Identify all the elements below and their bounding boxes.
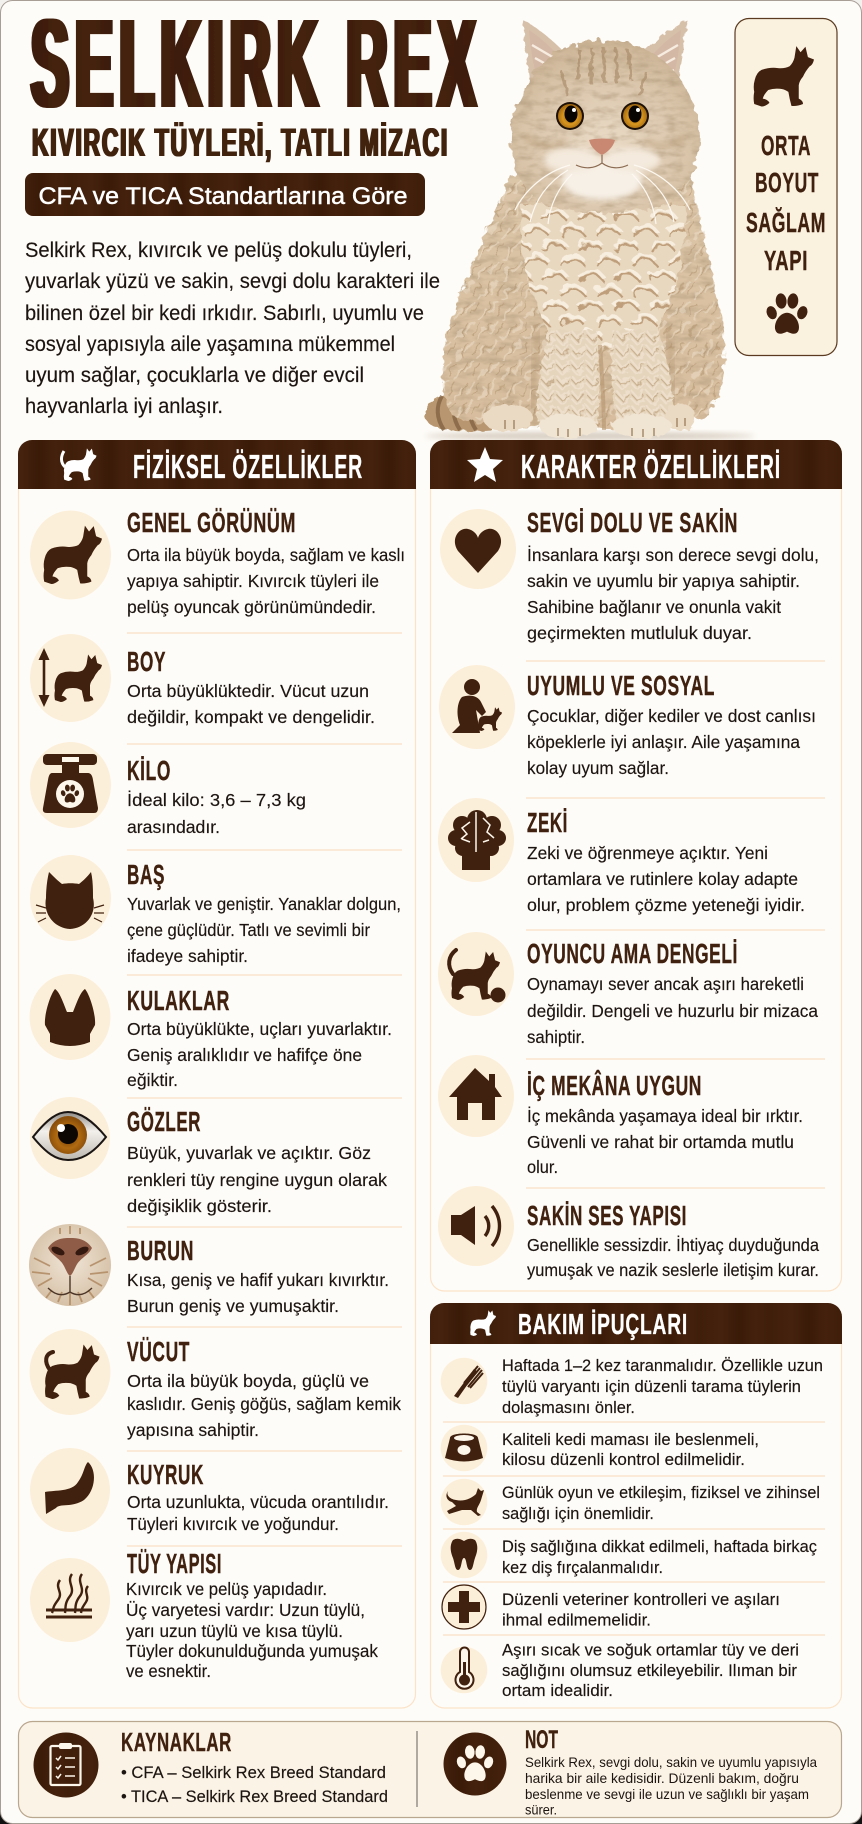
tip: grooming — [441, 1357, 823, 1417]
item: uyumlu ve sosyal: kolay uyum sağlar. — [527, 758, 669, 778]
note text: beslenme ve sevgi ile uzun ve sağlıklı bir yaşam — [525, 1786, 809, 1802]
tip: grooming: Haftada 1–2 kez taranmalıdır. Özellikle uzun — [502, 1357, 823, 1375]
item: kuyruk: KUYRUK — [127, 1459, 204, 1490]
item: zeki — [438, 798, 805, 915]
item: oyuncu ama dengeli: değildir. Dengeli ve huzurlu bir mizaca — [527, 1001, 818, 1021]
item: iç mekâna uygun: İÇ MEKÂNA UYGUN — [527, 1070, 702, 1101]
item: sevgi dolu ve sakin: sakin ve uyumlu bir yapıya sahiptir. — [527, 571, 800, 591]
item: gözler: renkleri tüy rengine uygun olarak — [127, 1170, 387, 1190]
item: iç mekâna uygun: İç mekânda yaşamaya ideal bir ırktır. — [527, 1106, 803, 1126]
item: sevgi dolu ve sakin: SEVGİ DOLU VE SAKİN — [527, 507, 738, 538]
heading: note: NOT — [525, 1726, 558, 1754]
size label: ORTA — [761, 130, 811, 161]
tip: food bowl: Kaliteli kedi maması ile beslenmeli, — [502, 1431, 759, 1449]
item: sakin ses yapısı: Genellikle sessizdir. İhtiyaç duyduğunda — [527, 1235, 819, 1255]
tip: food bowl: kilosu düzenli kontrol edilmelidir. — [502, 1451, 745, 1469]
panel header: care tips: BAKIM İPUÇLARI — [518, 1309, 688, 1341]
item: uyumlu ve sosyal — [439, 665, 816, 778]
item: iç mekâna uygun — [438, 1055, 803, 1177]
item: zeki: ortamlara ve rutinlere kolay adapte — [527, 869, 798, 889]
size badge — [735, 18, 837, 356]
item: sevgi dolu ve sakin: geçirmekten mutluluk duyar. — [527, 623, 752, 643]
item: gözler — [30, 1097, 387, 1216]
item: iç mekâna uygun: Güvenli ve rahat bir ortamda mutlu — [527, 1132, 794, 1152]
footer panel — [18, 1722, 842, 1818]
tip: temperature: Aşırı sıcak ve soğuk ortamlar tüy ve deri — [502, 1642, 799, 1660]
item: tüy yapısı — [30, 1548, 378, 1681]
note text: sürer. — [525, 1802, 557, 1818]
panel: character traits — [430, 440, 842, 1291]
size label — [746, 130, 826, 276]
item: genel görünüm: Orta ila büyük boyda, sağlam ve kaslı — [127, 545, 405, 565]
sources list — [121, 1764, 388, 1806]
item: zeki: Zeki ve öğrenmeye açıktır. Yeni — [527, 843, 768, 863]
item: zeki: ZEKİ — [527, 807, 568, 838]
intro text: yuvarlak yüzü ve sakin, sevgi dolu karakteri ile — [25, 270, 440, 293]
item: kilo: İdeal kilo: 3,6 – 7,3 kg — [127, 790, 306, 810]
panel: physical features — [18, 440, 416, 1708]
icon: clipboard — [34, 1732, 98, 1798]
item: gözler: GÖZLER — [127, 1106, 201, 1137]
size label: BOYUT — [755, 167, 819, 198]
tip: veterinary: ihmal edilmemelidir. — [502, 1612, 651, 1630]
item: sakin ses yapısı — [438, 1186, 819, 1280]
tip: tooth: kez diş fırçalanmalıdır. — [502, 1559, 663, 1577]
tip: veterinary: Düzenli veteriner kontrolleri ve aşıları — [502, 1591, 780, 1609]
panel: care tips — [430, 1303, 842, 1708]
item: tüy yapısı: Tüyler dokunulduğunda yumuşak — [126, 1641, 378, 1661]
item: burun: Burun geniş ve yumuşaktir. — [127, 1296, 339, 1316]
standards badge — [25, 173, 425, 216]
item: kilo — [30, 742, 306, 837]
tip: play — [441, 1479, 820, 1525]
item: vücut: yapısına sahiptir. — [127, 1420, 259, 1440]
item: vücut: kaslıdır. Geniş göğüs, sağlam kemik — [127, 1394, 401, 1414]
heading: sources: KAYNAKLAR — [121, 1727, 232, 1757]
item: baş: BAŞ — [127, 859, 165, 890]
item: vücut — [30, 1329, 401, 1440]
note block — [444, 1726, 817, 1818]
item: baş: ifadeye sahiptir. — [127, 946, 248, 966]
item: zeki: olur, problem çözme yeteneği iyidir. — [527, 895, 805, 915]
item: kilo: KİLO — [127, 755, 171, 786]
icon: cat silhouette — [754, 46, 814, 106]
panel header: physical features: FİZİKSEL ÖZELLİKLER — [133, 448, 363, 485]
intro text — [25, 239, 440, 418]
item: genel görünüm: yapıya sahiptir. Kıvırcık tüyleri ile — [127, 571, 379, 591]
tip: temperature: sağlığını olumsuz etkileyebilir. Ilıman bir — [502, 1662, 798, 1680]
sources list: • TICA – Selkirk Rex Breed Standard — [121, 1788, 388, 1806]
item: sakin ses yapısı: yumuşak ve nazik seslerle iletişim kurar. — [527, 1260, 819, 1280]
item: tüy yapısı: yarı uzun tüylü ve kısa tüylü. — [126, 1621, 343, 1641]
item: sevgi dolu ve sakin — [440, 507, 819, 643]
note text — [525, 1754, 817, 1818]
standards badge: CFA ve TICA Standartlarına Göre — [38, 183, 407, 210]
item: kuyruk — [30, 1448, 389, 1534]
tip: tooth — [441, 1532, 817, 1578]
item: kulaklar: Geniş aralıklıdır ve hafifçe öne — [127, 1045, 362, 1065]
item: tüy yapısı: Kıvırcık ve pelüş yapıdadır. — [126, 1579, 327, 1599]
item: kulaklar: Orta büyüklükte, uçları yuvarlaktır. — [127, 1019, 392, 1039]
tip: tooth: Diş sağlığına dikkat edilmeli, haftada birkaç — [502, 1538, 817, 1556]
hero section — [25, 0, 837, 440]
tip: play: sağlığı için önemlidir. — [502, 1505, 654, 1523]
tip: food bowl — [441, 1425, 759, 1471]
item: baş — [30, 855, 401, 966]
item: uyumlu ve sosyal: Çocuklar, diğer kediler ve dost canlısı — [527, 706, 816, 726]
sources block — [34, 1727, 388, 1806]
note text: harika bir aile kedisidir. Düzenli bakım, doğru — [525, 1770, 799, 1786]
item: burun — [29, 1224, 389, 1316]
item: boy: BOY — [127, 646, 166, 677]
item: uyumlu ve sosyal: köpeklerle iyi anlaşır. Aile yaşamına — [527, 732, 800, 752]
item: tüy yapısı: Üç varyetesi vardır: Uzun tüylü, — [126, 1600, 365, 1620]
tip: grooming: tüylü varyantı için düzenli tarama tüylerin — [502, 1378, 801, 1396]
panel header: care tips — [430, 1303, 842, 1344]
intro text: bilinen özel bir kedi ırkıdır. Sabırlı, uyumlu ve — [25, 302, 424, 325]
item: sevgi dolu ve sakin: Sahibine bağlanır ve onunla vakit — [527, 597, 781, 617]
item: tüy yapısı: TÜY YAPISI — [127, 1548, 222, 1579]
item: burun: Kısa, geniş ve hafif yukarı kıvırktır. — [127, 1270, 389, 1290]
tip: grooming: dolaşmasını önler. — [502, 1399, 635, 1417]
panel header: character traits — [430, 440, 842, 489]
item: kilo: arasındadır. — [127, 817, 220, 837]
item: baş: Yuvarlak ve geniştir. Yanaklar dolgun, — [127, 894, 401, 914]
item: kulaklar — [30, 974, 392, 1090]
item: vücut: VÜCUT — [127, 1336, 190, 1367]
item: kuyruk: Tüyleri kıvırcık ve yoğundur. — [127, 1514, 339, 1534]
item: baş: çene güçlüdür. Tatlı ve sevimli bir — [127, 920, 370, 940]
item: burun: BURUN — [127, 1235, 194, 1266]
item: sakin ses yapısı: SAKİN SES YAPISI — [527, 1200, 687, 1231]
cat illustration — [425, 20, 755, 440]
item: gözler: değişiklik gösterir. — [127, 1196, 272, 1216]
icon: paw — [765, 293, 809, 334]
tip: temperature: ortam idealidir. — [502, 1682, 613, 1700]
item: kuyruk: Orta uzunlukta, vücuda orantılıdır. — [127, 1492, 389, 1512]
item: boy: Orta büyüklüktedir. Vücut uzun — [127, 681, 369, 701]
icon: paw badge — [444, 1732, 506, 1796]
item: iç mekâna uygun: olur. — [527, 1157, 558, 1177]
intro text: sosyal yapısıyla aile yaşamına mükemmel — [25, 333, 395, 356]
item: oyuncu ama dengeli: Oynamayı sever ancak aşırı hareketli — [527, 974, 804, 994]
intro text: Selkirk Rex, kıvırcık ve pelüş dokulu tüyleri, — [25, 239, 412, 262]
item: sevgi dolu ve sakin: İnsanlara karşı son derece sevgi dolu, — [527, 545, 819, 565]
item: gözler: Büyük, yuvarlak ve açıktır. Göz — [127, 1143, 371, 1163]
item: oyuncu ama dengeli: sahiptir. — [527, 1027, 585, 1047]
item: boy — [30, 634, 375, 727]
item: oyuncu ama dengeli: OYUNCU AMA DENGELİ — [527, 938, 738, 969]
item: genel görünüm: GENEL GÖRÜNÜM — [127, 507, 296, 538]
item: boy: değildir, kompakt ve dengelidir. — [127, 707, 375, 727]
item: kulaklar: KULAKLAR — [127, 985, 230, 1016]
intro text: uyum sağlar, çocuklarla ve diğer evcil — [25, 364, 364, 387]
item: genel görünüm — [30, 507, 405, 617]
item: uyumlu ve sosyal: UYUMLU VE SOSYAL — [527, 670, 715, 701]
item: oyuncu ama dengeli — [438, 932, 818, 1047]
tip: temperature — [441, 1642, 799, 1700]
sources list: • CFA – Selkirk Rex Breed Standard — [121, 1764, 386, 1782]
subtitle: KIVIRCIK TÜYLERİ, TATLI MİZACI — [32, 120, 449, 165]
item: genel görünüm: pelüş oyuncak görünümündedir. — [127, 597, 376, 617]
tip: veterinary — [442, 1585, 780, 1630]
item: vücut: Orta ila büyük boyda, güçlü ve — [127, 1371, 369, 1391]
intro text: hayvanlarla iyi anlaşır. — [25, 395, 223, 418]
note text: Selkirk Rex, sevgi dolu, sakin ve uyumlu yapısıyla — [525, 1754, 817, 1770]
size label: YAPI — [764, 245, 808, 276]
item: tüy yapısı: ve esnektir. — [126, 1661, 211, 1681]
panel header: physical features — [18, 440, 416, 489]
tip: play: Günlük oyun ve etkileşim, fiziksel ve zihinsel — [502, 1484, 820, 1502]
item: kulaklar: eğiktir. — [127, 1070, 178, 1090]
